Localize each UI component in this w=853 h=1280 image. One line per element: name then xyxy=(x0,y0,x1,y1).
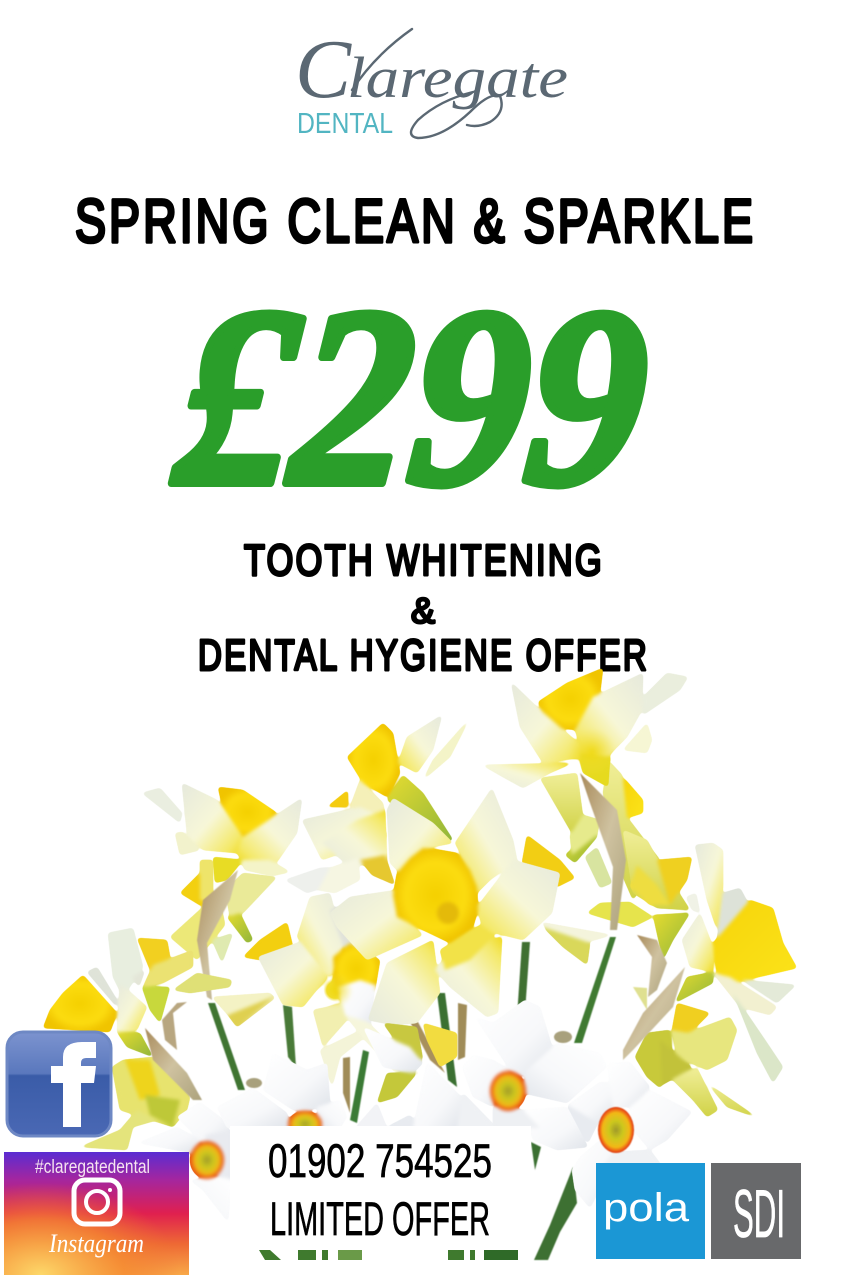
icon: facebook xyxy=(7,1032,111,1136)
flower: back right yellow xyxy=(540,760,660,900)
bract: top right papery sheath xyxy=(580,773,626,930)
hashtag: #claregatedental xyxy=(35,1157,150,1178)
offer line 2: DENTAL HYGIENE OFFER xyxy=(198,631,649,680)
bract: left papery sheath xyxy=(197,870,238,1000)
flower: centre lower pale details xyxy=(363,1023,457,1103)
flower: upper middle daffodil xyxy=(285,715,470,893)
flower: crown and petals under left daffodil xyxy=(212,922,293,1027)
limited offer: LIMITED OFFER xyxy=(270,1192,490,1245)
icon: instagram panel xyxy=(4,1152,189,1275)
flower: central daffodil xyxy=(330,788,560,1025)
flower: lower centre-left daffodil xyxy=(258,893,420,1087)
price: 299 pounds: £299 xyxy=(163,255,658,539)
logo swash xyxy=(352,29,502,138)
flower: white narcissus middle xyxy=(355,1062,497,1128)
flower: top right daffodil xyxy=(482,668,688,788)
flower: right middle yellow xyxy=(587,830,692,960)
logo subtitle: DENTAL xyxy=(297,108,393,140)
flower: white narcissus right xyxy=(568,1062,692,1208)
flower: left daffodil xyxy=(142,783,302,883)
offer line 1: TOOTH WHITENING xyxy=(244,536,604,585)
flower: left yellow behind xyxy=(137,938,232,1023)
flower: crown and petal behind centre xyxy=(522,835,612,965)
daffodil bouquet illustration xyxy=(43,668,797,1260)
logo: pola SDI xyxy=(596,1163,801,1259)
bract: right papery sheath xyxy=(623,935,685,1060)
instagram glyph xyxy=(74,1180,120,1224)
ampersand: & xyxy=(411,590,435,631)
flower: lower left yellow xyxy=(80,1057,190,1150)
offer text xyxy=(198,536,649,680)
flower: white narcissus left xyxy=(138,1102,232,1222)
pola text: pola xyxy=(603,1186,690,1230)
flower: white narcissus right centre xyxy=(462,1000,607,1150)
phone number: 01902 754525 xyxy=(268,1134,492,1187)
narcissus cup: right flower xyxy=(598,1107,634,1153)
pola panel xyxy=(596,1163,705,1259)
narcissus cup xyxy=(190,1141,224,1179)
narcissus cup xyxy=(288,1111,322,1137)
bract: lower left papery sheath xyxy=(145,1002,202,1100)
flower: white narcissus centre-left xyxy=(217,1053,347,1137)
flower: back left yellow xyxy=(170,860,277,963)
logo: Claregate Dental xyxy=(295,23,568,140)
logo: pola SDI: SDI xyxy=(733,1176,785,1252)
stem tips under box xyxy=(259,1250,518,1260)
flower: far right daffodil xyxy=(675,843,797,1083)
stems xyxy=(208,937,616,1260)
flower: far left daffodil xyxy=(43,928,153,1057)
logo wordmark: laregate xyxy=(347,45,568,110)
SDI panel xyxy=(711,1163,801,1259)
narcissus cup xyxy=(490,1071,526,1111)
logo initial: C xyxy=(295,23,352,116)
instagram wordmark: Instagram xyxy=(48,1229,144,1258)
flower: lower right yellow xyxy=(635,1003,758,1118)
callout: phone number box xyxy=(230,1126,531,1250)
